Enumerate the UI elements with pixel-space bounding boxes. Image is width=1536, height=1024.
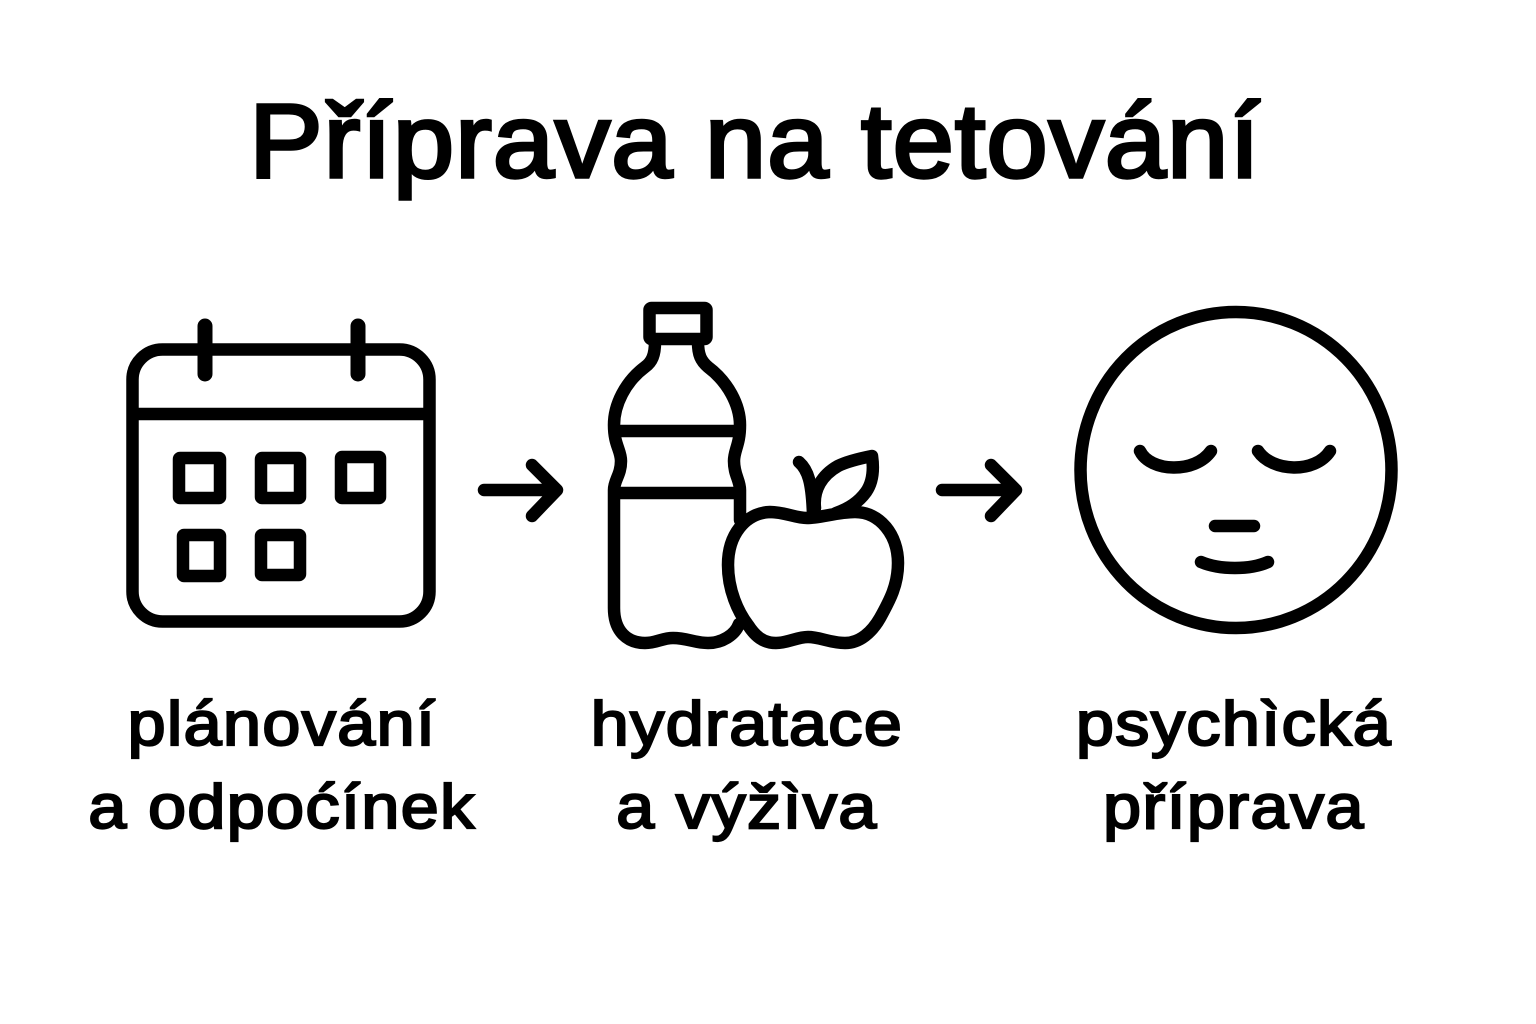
- icon: apple: [728, 456, 898, 643]
- label: mental preparation: psychìcká: [1076, 690, 1392, 759]
- label: hydration and nutrition: a výžìva: [616, 773, 878, 842]
- icon: bottle: [614, 308, 740, 643]
- title: Příprava na tetování: [249, 83, 1261, 200]
- label: planning and rest: plánování: [128, 690, 436, 759]
- label: planning and rest: a odpoćínek: [88, 773, 476, 842]
- label: hydration and nutrition: [591, 690, 903, 842]
- icon: calm face: [1080, 312, 1392, 628]
- icon: calendar: [132, 326, 430, 622]
- label: mental preparation: příprava: [1103, 773, 1365, 842]
- label: planning and rest: [88, 690, 477, 842]
- label: hydration and nutrition: hydratace: [591, 690, 903, 759]
- arrow: bottle to face: [942, 465, 1016, 516]
- label: mental preparation: [1076, 690, 1392, 842]
- arrow: calendar to bottle: [484, 465, 557, 516]
